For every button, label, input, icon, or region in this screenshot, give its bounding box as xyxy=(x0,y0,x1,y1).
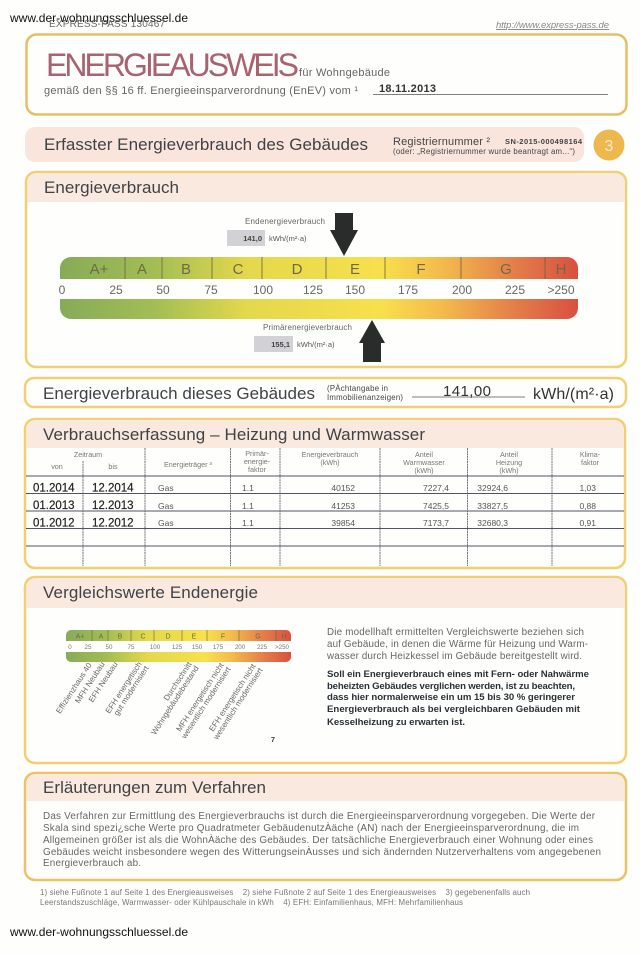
panel: comparison values xyxy=(25,577,626,763)
table row 2013: 33827,5 xyxy=(477,501,508,511)
panel heading: Vergleichswerte Endenergie xyxy=(43,583,258,602)
table row 2013 xyxy=(33,500,596,512)
table header: Primär- xyxy=(245,449,269,458)
table row 2013: Gas xyxy=(158,501,174,511)
table grid xyxy=(26,448,624,566)
comparison note: beheizten Gebäudes verglichen werden, ist zu beachten, xyxy=(327,681,575,692)
rotated category labels: Effizienzhaus 40 xyxy=(54,661,94,715)
scale numbers: 25 xyxy=(109,283,123,297)
primary energy value: kWh/(m²·a) xyxy=(297,340,335,349)
table row 2014: 1,03 xyxy=(579,483,596,493)
panel: consumption table xyxy=(25,419,625,568)
scale bar: end energy: C xyxy=(233,261,244,278)
registration number: SN-2015-000498164 xyxy=(505,137,583,146)
table row 2013: 41253 xyxy=(331,501,355,511)
mini scale chart: E xyxy=(192,634,197,640)
scale bar: end energy: H xyxy=(556,261,566,278)
scale bar: primary energy xyxy=(60,299,578,319)
explanation paragraph: Allgemeinen größer ist als die WohnÀäche des Gebäudes. Der tatsächliche Energieverbrauch einer Wohnung oder eines xyxy=(43,835,593,846)
panel: section heading xyxy=(25,127,584,162)
table row 2014: 40152 xyxy=(331,483,355,493)
primary energy value: 155,1 xyxy=(271,340,290,349)
section title: Erfasster Energieverbrauch des Gebäudes xyxy=(44,135,368,154)
table header: (kWh) xyxy=(320,458,340,467)
page seven mark: 7 xyxy=(271,735,275,744)
panel: header xyxy=(26,34,626,114)
consumption value: 141,00 xyxy=(443,383,491,400)
table row 2013: 1.1 xyxy=(242,501,254,511)
table row 2013: 7425,5 xyxy=(423,501,449,511)
mini scale chart: D xyxy=(165,634,171,640)
comparison paragraph: wasser durch Heizkessel im Gebäude bereitgestellt wird. xyxy=(326,651,582,662)
mini scale chart: 225 xyxy=(257,644,268,651)
scale bar: end energy: F xyxy=(416,261,426,278)
scale numbers: 150 xyxy=(345,283,365,297)
consumption label: Energieverbrauch dieses Gebäudes xyxy=(43,384,315,403)
title: ENERGIEAUSWEIS xyxy=(46,47,299,83)
rotated category labels: EFH energetisch xyxy=(104,660,144,715)
mini scale chart: 50 xyxy=(106,644,113,651)
mini scale chart: 75 xyxy=(128,644,135,651)
page number badge xyxy=(594,130,624,160)
table row 2014: 32924,6 xyxy=(477,483,508,493)
scale bar: end energy: A xyxy=(137,261,147,278)
scale bar: end energy: E xyxy=(350,261,360,278)
subtitle: für Wohngebäude xyxy=(299,67,390,79)
table header: Energieträger ³ xyxy=(164,460,213,469)
registration note: (oder: „Registriernummer wurde beantragt am...“) xyxy=(393,147,575,156)
watermark top: www.der-wohnungsschluessel.de xyxy=(9,11,188,25)
table row 2012: 01.2012 xyxy=(33,518,75,530)
mini scale chart: 0 xyxy=(68,644,72,651)
table row 2012: 12.2012 xyxy=(92,518,134,530)
arrow: primary energy xyxy=(359,320,385,362)
page number badge: 3 xyxy=(605,138,614,155)
table row 2014: 12.2014 xyxy=(92,482,134,494)
panel: energy consumption xyxy=(26,172,626,367)
primary energy value xyxy=(254,336,335,352)
mini scale chart: C xyxy=(140,634,146,640)
rotated category labels: wesentlich modernisiert xyxy=(211,666,265,742)
scale numbers: >250 xyxy=(547,283,575,297)
primary energy label: Primärenergieverbrauch xyxy=(263,323,352,332)
comparison paragraph: auf Gebäude, in denen die Wärme für Heizung und Warm- xyxy=(327,639,588,650)
table row 2012: 32680,3 xyxy=(477,518,508,528)
end energy label: Endenergieverbrauch xyxy=(245,217,325,226)
explanation paragraph: Skala sind spezi¿sche Werte pro Quadratmeter GebäudenutzÀäche (AN) nach der Energieeinsparverordnung, die im xyxy=(43,823,579,834)
scale numbers: 225 xyxy=(505,283,525,297)
table row 2012: 0,91 xyxy=(579,518,596,528)
end energy value xyxy=(227,230,307,246)
date: 18.11.2013 xyxy=(379,83,436,95)
mini scale chart: G xyxy=(255,634,261,640)
mini scale chart: 25 xyxy=(85,644,92,651)
mini scale chart: 200 xyxy=(235,644,246,651)
mini scale chart: >250 xyxy=(275,644,290,651)
panel heading: Erläuterungen zum Verfahren xyxy=(43,778,266,797)
table row 2012: 1.1 xyxy=(242,518,254,528)
end energy value: kWh/(m²·a) xyxy=(269,234,307,243)
table header: (kWh) xyxy=(414,466,434,475)
panel heading: Energieverbrauch xyxy=(44,178,179,197)
rotated category labels: Wohngebäudebestand xyxy=(149,664,201,736)
source url: http://www.express-pass.de xyxy=(496,20,609,31)
table header: bis xyxy=(108,462,118,471)
table row 2013: 01.2013 xyxy=(33,500,75,512)
footnotes: Leerstandszuschläge, Warmwasser- oder Kühlpauschale in kWh 4) EFH: Einfamilienhaus, MFH: Mehrfamilienhaus xyxy=(40,898,463,907)
consumption unit: kWh/(m²·a) xyxy=(533,386,614,403)
mini scale chart: F xyxy=(221,634,225,640)
mini scale chart: A xyxy=(99,634,104,640)
mini scale chart: 175 xyxy=(213,644,224,651)
scale bar: end energy: A+ xyxy=(90,261,109,278)
table header: (kWh) xyxy=(499,466,519,475)
mini scale chart: 150 xyxy=(192,644,203,651)
explanation paragraph: Energieverbrauch ab. xyxy=(43,858,141,869)
rotated category labels xyxy=(54,660,265,742)
table row 2014: 7227,4 xyxy=(423,483,449,493)
table row 2014 xyxy=(33,482,596,494)
table header: Zeitraum xyxy=(74,450,102,459)
table row 2013: 0,88 xyxy=(579,501,596,511)
footnotes: 1) siehe Fußnote 1 auf Seite 1 des Energieausweises 2) siehe Fußnote 2 auf Seite 1 des Energieausweises 3) gegebenenfalls auch xyxy=(40,888,530,897)
table header: faktor xyxy=(248,465,267,474)
table header xyxy=(51,449,601,475)
scale bar: end energy: D xyxy=(292,261,303,278)
watermark bottom: www.der-wohnungsschluessel.de xyxy=(9,925,188,939)
table header: Warmwasser xyxy=(403,458,445,467)
table header: energie- xyxy=(244,457,271,466)
comparison note: Kesselheizung zu erwarten ist. xyxy=(327,717,465,728)
scale bar: end energy: B xyxy=(181,261,191,278)
scale numbers: 0 xyxy=(59,283,66,297)
rotated category labels: EFH Neubau xyxy=(87,660,120,704)
mini scale chart: A+ xyxy=(76,634,84,640)
end energy value: 141,0 xyxy=(243,234,262,243)
rotated category labels: EFH energetisch nicht xyxy=(207,662,258,733)
comparison paragraph xyxy=(326,627,588,662)
table row 2014: 1.1 xyxy=(242,483,254,493)
mini scale chart: 100 xyxy=(150,644,161,651)
panel heading: Verbrauchserfassung – Heizung und Warmwasser xyxy=(43,425,425,444)
comparison paragraph: Die modellhaft ermittelten Vergleichswerte beziehen sich xyxy=(327,627,584,638)
comparison note: Energieverbrauch als bei vergleichbaren Gebäuden mit xyxy=(327,704,581,715)
rotated category labels: Durchschnitt xyxy=(162,660,194,702)
mini scale chart: H xyxy=(281,634,287,640)
scale numbers xyxy=(59,283,575,297)
scale numbers: 75 xyxy=(204,283,218,297)
comparison note xyxy=(327,669,589,728)
rotated category labels: wesentlich modernisiert xyxy=(179,665,233,741)
arrow: end energy xyxy=(330,213,358,256)
rotated category labels: MFH energetisch nicht xyxy=(175,661,226,733)
table header: von xyxy=(51,462,63,471)
scale bar: end energy xyxy=(60,257,578,279)
registration label: Registriernummer ² xyxy=(393,136,490,148)
table header: faktor xyxy=(581,458,600,467)
explanation paragraph: Das Verfahren zur Ermittlung des Energieverbrauchs ist durch die Energieeinsparverordnung vorgegeben. Die Werte der xyxy=(43,811,596,822)
explanation paragraph xyxy=(43,811,601,869)
mini scale chart: B xyxy=(118,634,123,640)
table row 2013: 12.2013 xyxy=(92,500,134,512)
scale bar: end energy: G xyxy=(500,261,512,278)
table row 2012 xyxy=(33,518,596,530)
comparison note: dass hier normalerweise ein um 15 bis 30 % geringerer xyxy=(327,692,575,703)
mini scale chart: 125 xyxy=(172,644,183,651)
panel: building consumption xyxy=(25,378,626,407)
table header: Heizung xyxy=(496,458,522,467)
rotated category labels: MFH Neubau xyxy=(73,660,107,705)
table header: Anteil xyxy=(500,450,518,459)
comparison note: Soll ein Energieverbrauch eines mit Fern- oder Nahwärme xyxy=(327,669,589,680)
listing note: (PÀchtangabe in xyxy=(327,384,388,393)
document reference: EXPRESS-PASS 130467 xyxy=(49,19,165,30)
mini scale chart xyxy=(66,630,291,662)
table row 2014: 01.2014 xyxy=(33,482,75,494)
table header: Energieverbrauch xyxy=(302,450,358,459)
table header: Klima- xyxy=(580,450,601,459)
rotated category labels: gut modernisiert xyxy=(112,664,151,717)
table header: Anteil xyxy=(415,450,433,459)
table row 2014: Gas xyxy=(158,483,174,493)
table row 2012: Gas xyxy=(158,518,174,528)
legal basis: gemäß den §§ 16 ff. Energieeinsparverordnung (EnEV) vom ¹ xyxy=(44,85,358,97)
table row 2012: 7173,7 xyxy=(423,518,449,528)
scale numbers: 125 xyxy=(303,283,323,297)
explanation paragraph: Gebäudes weicht insbesondere wegen des WitterungseinÀusses und sich ändernden Nutzerverhaltens vom angegebenen xyxy=(43,847,601,858)
panel: procedure notes xyxy=(25,773,626,880)
scale numbers: 50 xyxy=(156,283,170,297)
scale numbers: 200 xyxy=(452,283,472,297)
table row 2012: 39854 xyxy=(331,518,355,528)
scale numbers: 100 xyxy=(253,283,273,297)
footnotes xyxy=(40,888,530,907)
scale numbers: 175 xyxy=(398,283,418,297)
listing note line two: Immobilienanzeigen) xyxy=(327,393,403,402)
